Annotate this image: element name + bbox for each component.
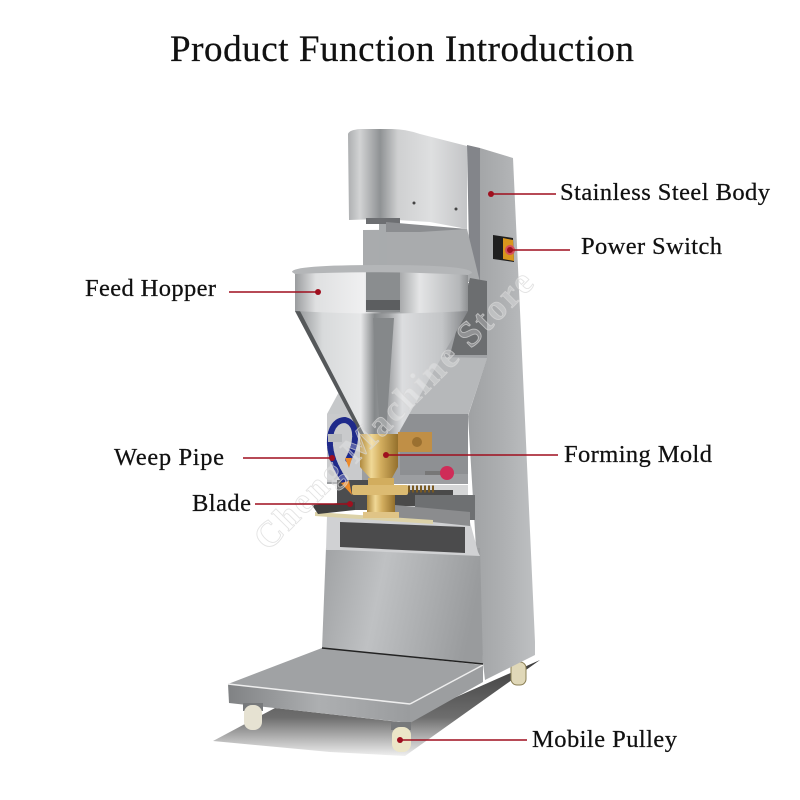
callout: stainless steel body: Stainless Steel Body: [560, 179, 771, 206]
upper head housing: [348, 129, 467, 229]
screws: [412, 202, 458, 210]
floor shadow: [213, 660, 540, 756]
callout: feed hopper: Feed Hopper: [85, 275, 216, 302]
rear panel: [363, 229, 480, 282]
shaft: [366, 218, 467, 266]
icon: left wheel: [243, 703, 263, 730]
machine illustration: [213, 129, 540, 756]
callout: power switch: Power Switch: [581, 233, 722, 260]
stainless steel column: [467, 145, 535, 680]
base platform: [228, 648, 483, 723]
hopper cone: [295, 311, 468, 434]
callout: blade: Blade: [192, 490, 251, 517]
callout: weep pipe: Weep Pipe: [114, 444, 224, 471]
callout: forming mold: [383, 441, 712, 468]
icon: red knob: [425, 466, 454, 480]
icon: front wheel: [391, 722, 411, 752]
icon: power switch: [493, 235, 515, 262]
callout: feed hopper: [85, 275, 321, 302]
title: Product Function Introduction: [170, 29, 634, 70]
callout: power switch: [507, 233, 722, 260]
watermark: Cheng Machine Store: [245, 262, 541, 558]
dark trough: [326, 516, 480, 556]
weep pipe: [328, 420, 355, 495]
feed hopper cylinder: [292, 265, 472, 314]
middle housing: [327, 390, 468, 520]
forming mold: [352, 432, 435, 518]
callout: forming mold: Forming Mold: [564, 441, 712, 468]
icon: rear wheel: [511, 662, 526, 685]
hopper rim: [292, 265, 472, 275]
mechanism: [312, 470, 475, 526]
callout: mobile pulley: [397, 726, 678, 753]
right bracket panel: [417, 283, 487, 415]
callout: weep pipe: [114, 444, 335, 471]
callout: mobile pulley: Mobile Pulley: [532, 726, 678, 753]
lower panel: [322, 548, 483, 664]
callout: blade: [192, 490, 353, 517]
